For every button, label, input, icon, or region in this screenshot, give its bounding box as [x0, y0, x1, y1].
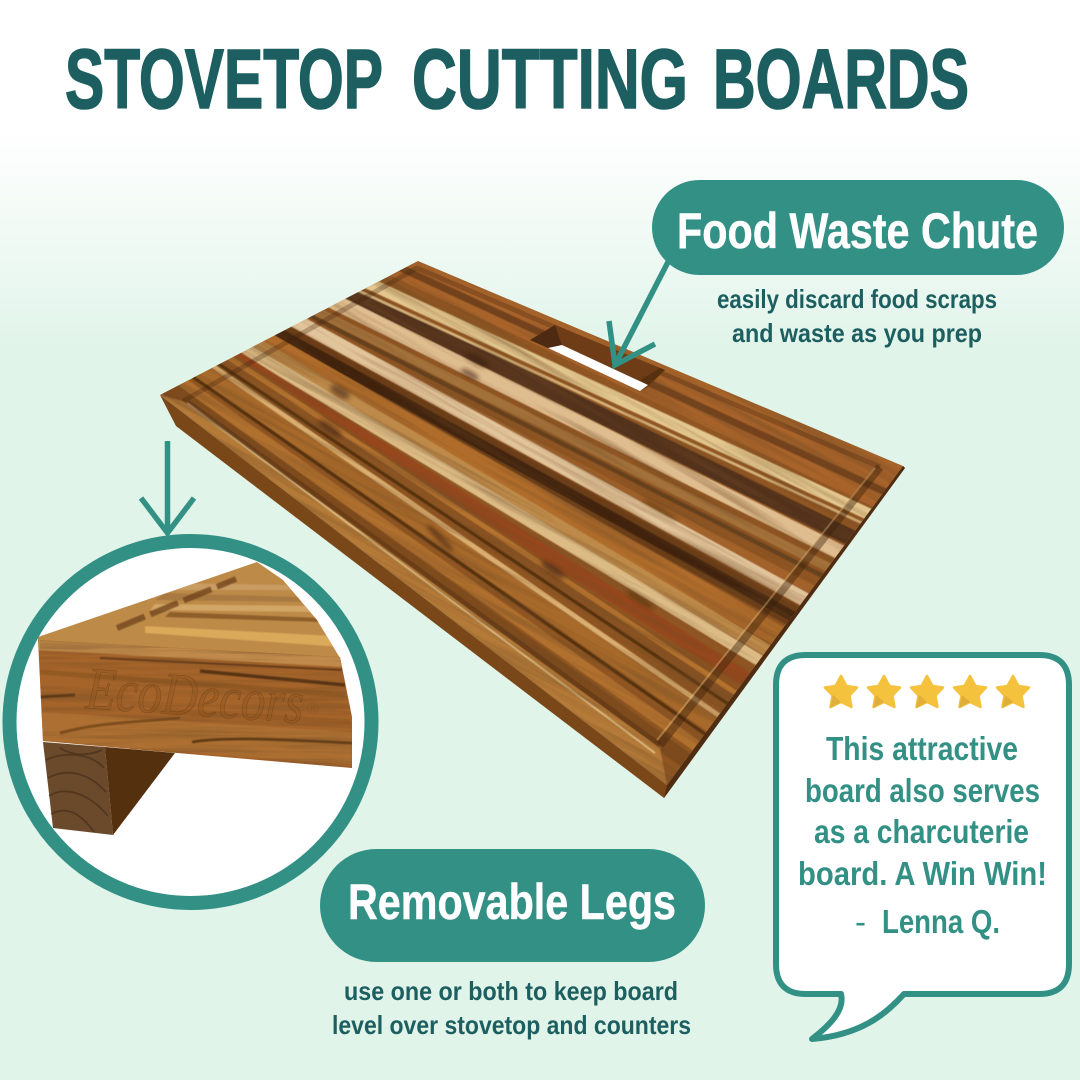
five star rating: [824, 676, 1029, 708]
review quote: as a charcuterie: [814, 813, 1029, 850]
title: STOVETOP: [65, 32, 383, 126]
arrow: to food waste chute: [609, 262, 668, 365]
callout: removable legs: Removable Legs: [348, 874, 676, 930]
text: chute description: and waste as you prep: [732, 318, 982, 348]
text: chute description: easily discard food scraps: [717, 284, 997, 314]
text: legs description: level over stovetop and counters: [332, 1010, 691, 1040]
juice groove: [185, 268, 880, 745]
inset board top: [38, 562, 340, 657]
review speech bubble: [776, 655, 1069, 1039]
title: BOARDS: [713, 32, 969, 126]
callout: food waste chute: [652, 180, 1064, 275]
callout: removable legs: [320, 849, 705, 962]
review quote: This attractive: [826, 730, 1018, 767]
arrow: to legs inset: [141, 441, 194, 533]
food waste chute opening: [530, 325, 665, 391]
engraved logo: [84, 669, 318, 724]
review quote: -: [855, 903, 866, 940]
inset: removable legs close-up: [10, 541, 372, 903]
title: [65, 32, 969, 126]
cutting board photo: [160, 261, 905, 798]
review quote: board also serves: [805, 772, 1040, 809]
inset removable leg: [43, 742, 175, 835]
text: legs description: [332, 976, 691, 1040]
review quote: board. A Win Win!: [798, 855, 1047, 892]
board side edges: [160, 395, 905, 798]
wood grain texture: [160, 265, 898, 785]
text: chute description: [717, 284, 997, 348]
engraved logo: EcoDecors: [83, 655, 306, 736]
inset board front face: [38, 640, 352, 768]
text: legs description: use one or both to keep board: [344, 976, 678, 1006]
review quote: Lenna Q.: [882, 903, 1000, 940]
review quote: [798, 730, 1047, 940]
board top face with wood stripes: [160, 261, 903, 785]
knots and dark figure marks: [316, 350, 679, 611]
title: CUTTING: [412, 32, 688, 126]
engraved logo: ®: [306, 698, 320, 718]
